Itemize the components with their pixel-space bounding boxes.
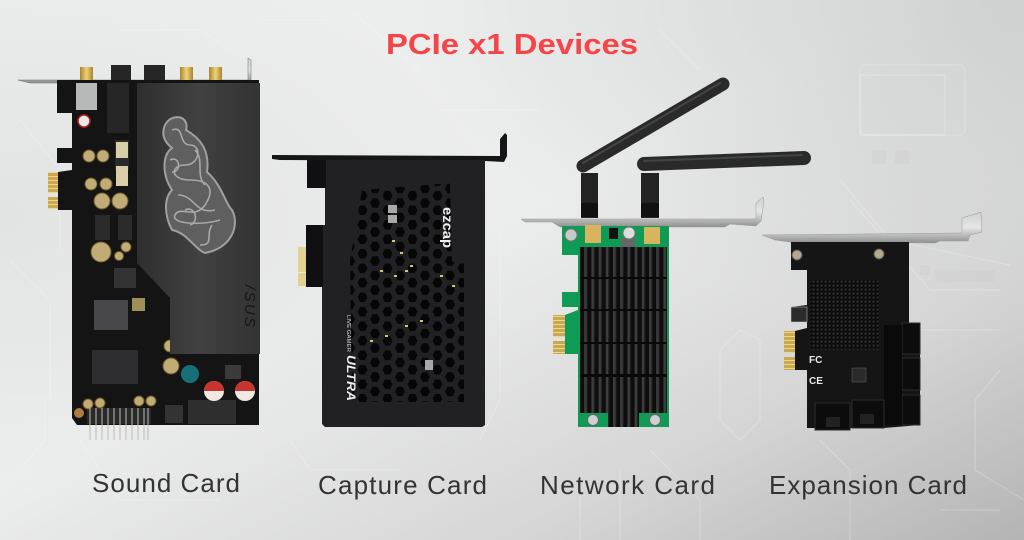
asus logo: /SUS (241, 284, 258, 327)
device: sound card (18, 58, 260, 440)
logos: CE (809, 376, 823, 387)
SATA ports bottom (815, 400, 884, 430)
text: ULTRA: ULTRA (344, 355, 358, 401)
pin header (90, 408, 148, 440)
pin-grid heat sink (810, 280, 879, 350)
circuit board (57, 80, 259, 425)
circuit board (791, 242, 920, 428)
label: Expansion Card: Expansion Card (769, 470, 967, 500)
logos (809, 355, 823, 387)
antenna one (581, 83, 723, 218)
SATA ports right (884, 323, 920, 425)
gold edge connector (48, 172, 59, 209)
antenna two (641, 155, 804, 218)
jade dragon emblem (163, 117, 235, 253)
hexagonal vent grid (350, 183, 464, 402)
circuit board (562, 226, 669, 427)
device: capture card (272, 133, 507, 427)
gold edge connector (553, 315, 566, 354)
board components (74, 83, 255, 424)
device: network card (521, 83, 804, 427)
controller chip (852, 368, 866, 382)
rf connectors and chip (565, 225, 660, 248)
device: expansion card (762, 212, 982, 430)
gold edge connector (784, 331, 796, 370)
bracket (18, 58, 251, 83)
label: Sound Card: Sound Card (92, 468, 240, 498)
audio jacks (80, 65, 222, 82)
logos: FC (809, 355, 822, 366)
title: PCIe x1 Devices (386, 29, 638, 61)
text: LIVE GAMER: LIVE GAMER (345, 315, 351, 352)
bracket (521, 197, 764, 227)
label: Network Card: Network Card (540, 470, 715, 500)
bracket (762, 212, 982, 243)
card body (306, 160, 485, 427)
bracket (272, 133, 507, 162)
brand text: ezcap: ezcap (440, 207, 456, 248)
mounting screws (792, 249, 884, 260)
heat sink with jade dragon emblem (137, 83, 260, 354)
gold edge connector (298, 247, 308, 286)
finned heat sink (578, 247, 669, 427)
white warning label (791, 307, 807, 322)
label: Capture Card: Capture Card (318, 470, 487, 500)
